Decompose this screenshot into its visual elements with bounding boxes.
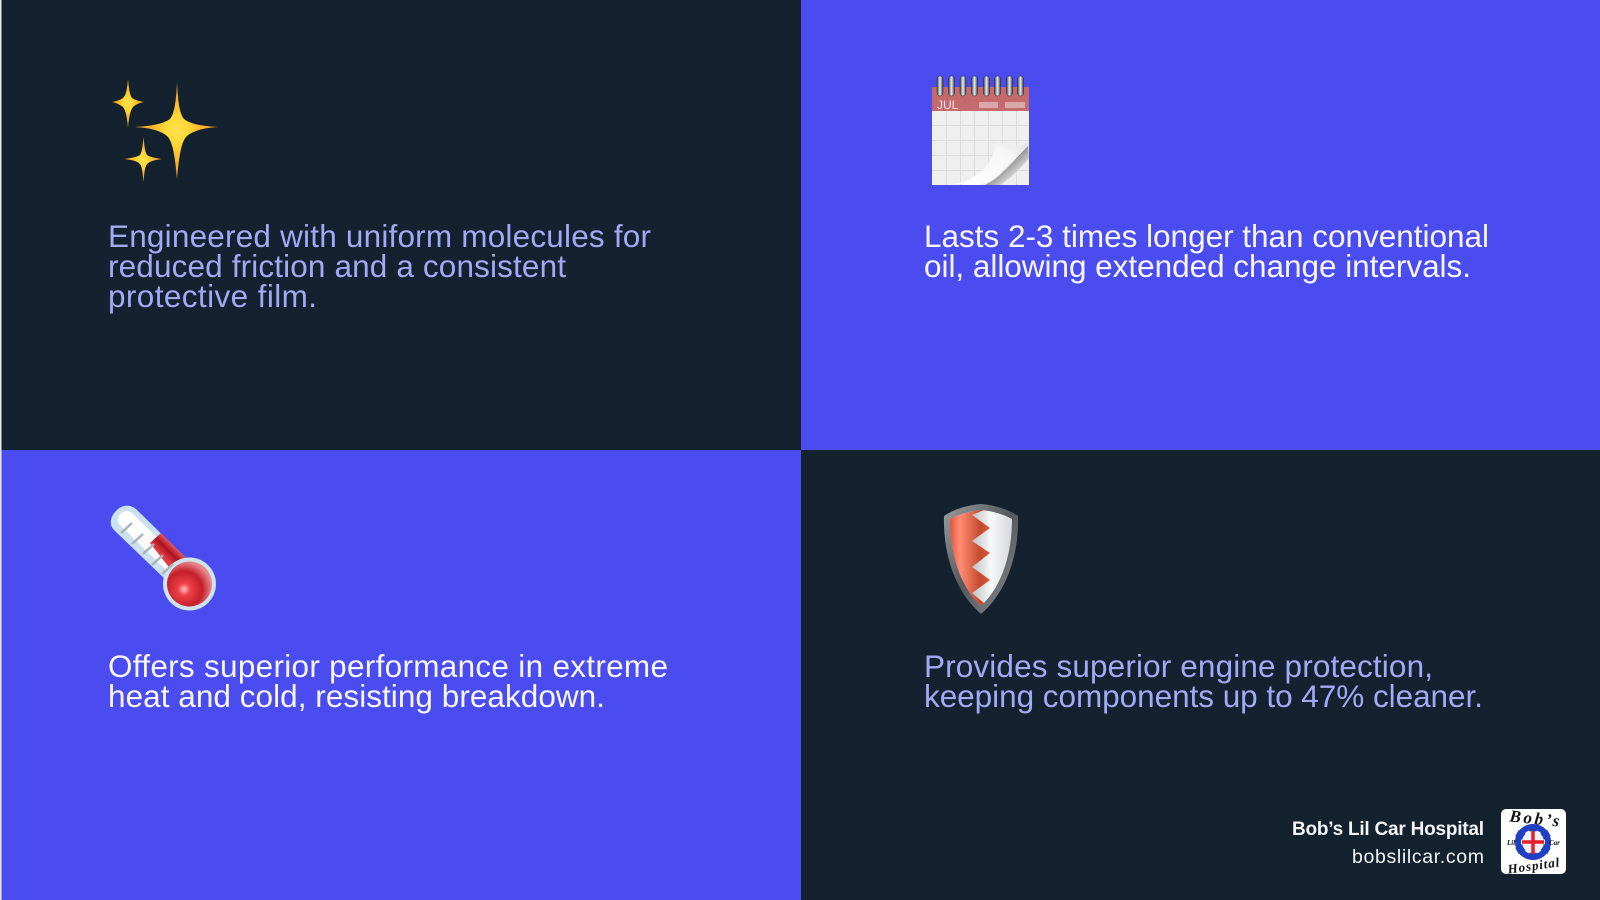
text: engine protection: keeping components up to 47% cleaner. — [924, 678, 1483, 714]
text: extreme temperature — [108, 648, 668, 714]
text: extreme temperature: heat and cold, resisting breakdown. — [108, 678, 605, 714]
logo — [1501, 806, 1566, 877]
text: engineered — [108, 218, 651, 314]
text: longer lasting: Lasts 2-3 times longer than conventional — [924, 218, 1489, 254]
text: engineered: Engineered with uniform molecules for — [108, 218, 651, 254]
panel: engineered molecules — [2, 0, 801, 450]
panel: engine protection — [801, 450, 1600, 900]
logo: Lil — [1506, 839, 1515, 847]
text: engineered: reduced friction and a consistent — [108, 248, 566, 284]
page edge strip — [0, 0, 2, 900]
footer: brand name and url — [1292, 819, 1484, 868]
icon: sparkles — [112, 79, 218, 182]
logo: Bob’s — [1508, 806, 1561, 831]
icon: shield — [944, 504, 1018, 614]
text: extreme temperature: Offers superior performance in extreme — [108, 648, 668, 684]
panel: longer lasting — [801, 0, 1600, 450]
text: engine protection: Provides superior engine protection, — [924, 648, 1433, 684]
icon: calendar: JUL — [937, 98, 959, 112]
text: engine protection — [924, 648, 1483, 714]
footer: brand name and url: bobslilcar.com — [1352, 846, 1484, 868]
logo: Hospital — [1506, 854, 1561, 877]
text: longer lasting — [924, 218, 1489, 284]
panel: extreme temperature — [2, 450, 801, 900]
text: longer lasting: oil, allowing extended change intervals. — [924, 248, 1471, 284]
icon: thermometer — [111, 506, 216, 610]
icon: calendar — [932, 76, 1029, 185]
logo: Car — [1549, 839, 1560, 847]
footer: brand name and url: Bob’s Lil Car Hospital — [1292, 819, 1484, 840]
text: engineered: protective film. — [108, 278, 317, 314]
